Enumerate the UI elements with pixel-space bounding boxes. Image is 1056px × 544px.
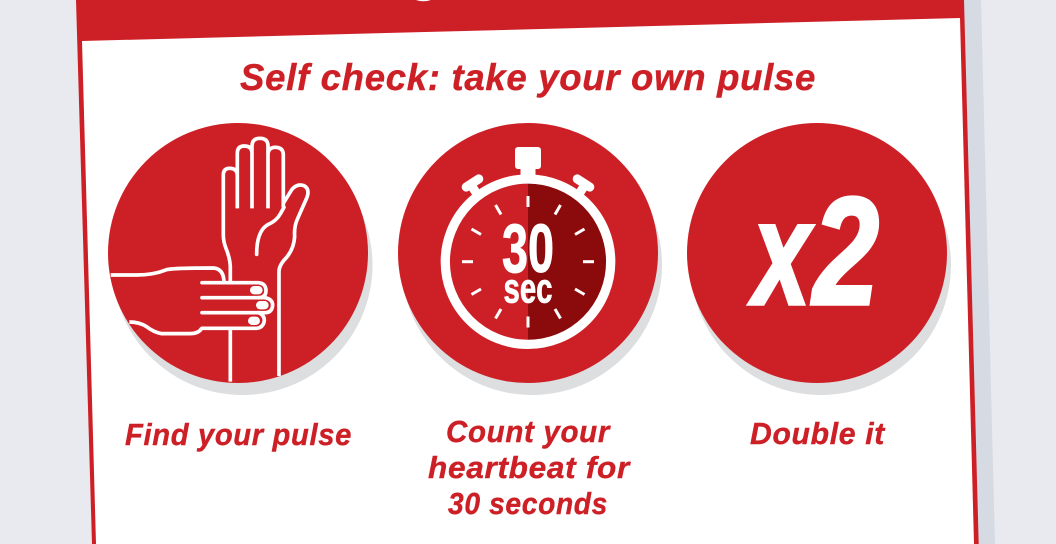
clipped header letter descender: [416, 0, 431, 1]
label: Double it: [750, 416, 886, 451]
step 2: count heartbeat: [398, 123, 662, 521]
card shadow: [960, 0, 995, 544]
outer ring: [445, 179, 611, 344]
step 1: find your pulse: [108, 123, 372, 452]
icon: stopwatch: [445, 147, 611, 344]
step 3: double it: [687, 123, 951, 451]
tick marks: [462, 196, 594, 328]
red circle: [108, 123, 368, 383]
label: Count your: [446, 414, 611, 449]
red circle: [398, 123, 658, 383]
top knob: [515, 147, 541, 169]
icon: x2: x: [748, 171, 814, 336]
label: Find your pulse: [125, 417, 352, 452]
side buttons: [460, 173, 596, 200]
icon: x2: [748, 166, 879, 337]
circle shadow: [112, 135, 372, 395]
number 30: 30: [502, 210, 554, 287]
dark half dial: [528, 183, 606, 340]
label: 30 seconds: [448, 486, 608, 521]
sec: sec: [504, 264, 552, 312]
circle shadow: [402, 135, 662, 395]
icon: hands taking pulse: [111, 138, 308, 382]
icon: x2: 2: [811, 166, 879, 337]
circle shadow: [691, 135, 951, 395]
label: [428, 414, 631, 521]
label: heartbeat for: [428, 450, 631, 485]
red circle: [687, 123, 947, 383]
title: Self check: take your own pulse: [240, 57, 816, 98]
